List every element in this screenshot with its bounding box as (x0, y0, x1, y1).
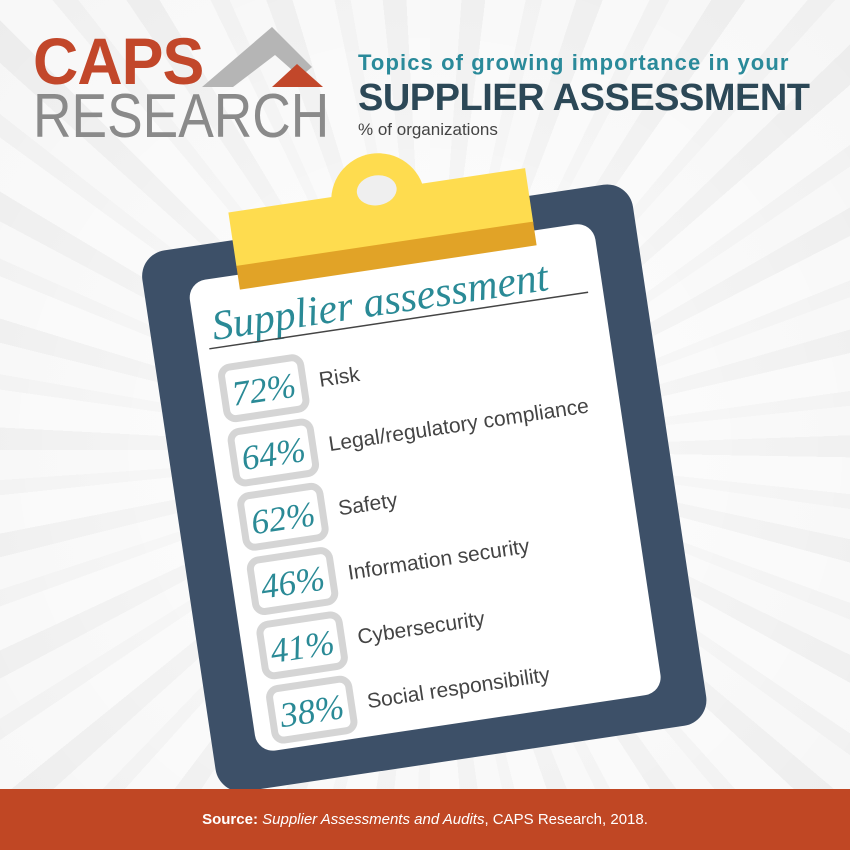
subtitle: Topics of growing importance in your (358, 50, 790, 75)
row: cybersecurity: 41% (268, 623, 337, 671)
unit note: % of organizations (358, 120, 498, 139)
row: risk: 72% (229, 366, 299, 414)
row: social responsibility: Social responsibility (366, 663, 552, 713)
logo text RESEARCH: RESEARCH (33, 82, 329, 151)
row: risk (220, 348, 364, 420)
footer source bar (0, 789, 850, 850)
row: social responsibility (268, 648, 554, 741)
row: information security: Information security (346, 535, 531, 585)
row: safety: 62% (249, 494, 318, 542)
row: legal: 64% (239, 430, 308, 478)
row: cybersecurity: Cybersecurity (356, 607, 487, 649)
board (139, 181, 710, 795)
row: risk: Risk (317, 363, 362, 392)
clip (223, 132, 537, 290)
logo text CAPS: CAPS (33, 24, 203, 98)
row: information security (249, 520, 534, 613)
row: social responsibility: 38% (276, 687, 347, 735)
logo (33, 24, 329, 151)
row: information security: 46% (258, 559, 327, 607)
heading: Supplier assessment (209, 254, 553, 350)
logo mark (202, 27, 323, 87)
paper (187, 222, 663, 753)
row: cybersecurity (259, 592, 489, 677)
row: legal: Legal/regulatory compliance (327, 395, 590, 456)
footer source bar: Source: Supplier Assessments and Audits, CAPS Research, 2018. (202, 811, 648, 828)
row: safety: Safety (337, 489, 399, 520)
main title: SUPPLIER ASSESSMENT (358, 77, 810, 119)
title block (358, 50, 810, 139)
row: legal (230, 380, 592, 484)
row: safety (240, 474, 402, 548)
